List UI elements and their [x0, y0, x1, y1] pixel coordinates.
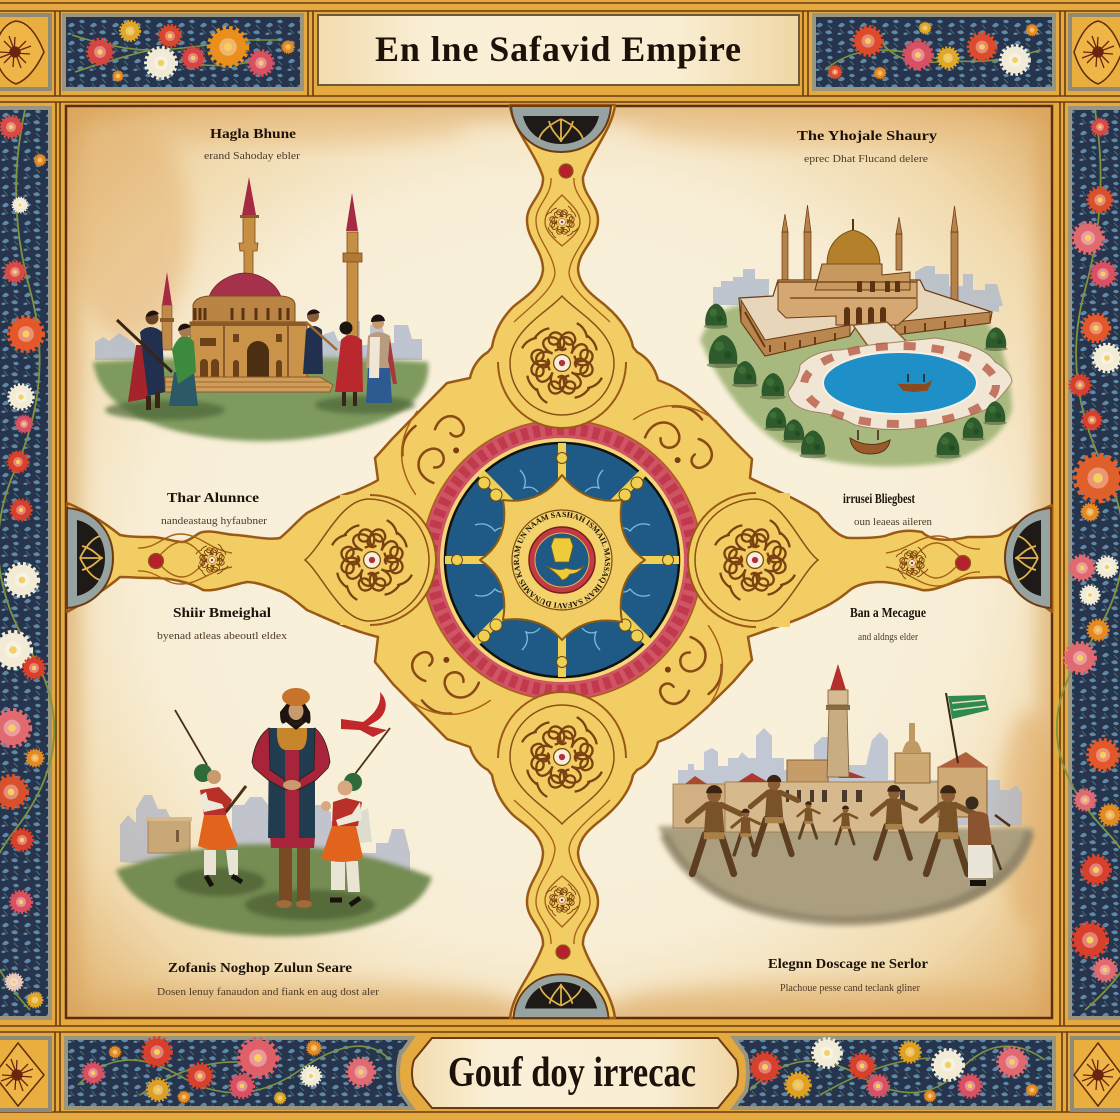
domed hall: [165, 273, 333, 392]
label: top left: [204, 127, 301, 162]
skyline: [120, 795, 410, 883]
ornament silhouette: [67, 105, 1052, 1018]
end caps: [67, 106, 1051, 1018]
watch tower: [826, 664, 850, 777]
label: bottom right: Elegnn Doscage ne Serlor: [768, 957, 928, 972]
bottom banner text: Gouf doy irrecac: [448, 1050, 696, 1096]
ground shadows: [175, 868, 375, 920]
palace: [739, 219, 992, 360]
label: upper left arm: nandeastaug hyfaubner: [161, 516, 268, 527]
ground: [700, 305, 1012, 466]
label: upper right arm: irrusei Bliegbest: [843, 492, 915, 507]
title text: En lne Safavid Empire: [375, 29, 741, 69]
label: bottom right: [768, 957, 928, 994]
central emblem: [546, 538, 584, 580]
central minaret: [239, 177, 259, 277]
label: bottom left: [157, 961, 380, 998]
white-robed figure: [966, 796, 1010, 886]
right minaret: [343, 193, 362, 337]
floral panel: bottom left: [66, 1038, 412, 1108]
ground: [658, 826, 1033, 922]
corner ornament: bottom left: [0, 1038, 50, 1110]
label: upper right arm: oun leaeas aileren: [854, 517, 933, 528]
floral panel: top left: [64, 15, 302, 89]
ground edge shading: [664, 832, 1030, 921]
vignette: mosque with figures, top left: [93, 177, 428, 441]
vignette: battle before the city, bottom right: [658, 664, 1033, 922]
red pennant: [341, 692, 387, 737]
label: bottom left: Zofanis Noghop Zulun Seare: [168, 961, 352, 976]
green flag: [946, 693, 989, 763]
label: lower left arm: byenad atleas abeoutl eldex: [157, 631, 288, 642]
ground: [116, 844, 432, 936]
vignette: noble with attendants, bottom left: [116, 688, 432, 936]
red jewels: [148, 164, 970, 959]
label: top right: The Yhojale Shaury: [797, 129, 937, 144]
right attendant: [321, 728, 390, 905]
label: lower right arm: [850, 606, 926, 643]
label: upper right arm: [843, 492, 933, 528]
small boat: [850, 430, 890, 454]
label: top left: erand Sahoday ebler: [204, 151, 301, 162]
trees: [704, 304, 1008, 458]
pool: [788, 338, 1012, 430]
corner arabesques: [375, 379, 749, 741]
courtier in red: [335, 322, 363, 406]
courtier in blue and cream: [366, 314, 397, 403]
bottom lobe: [498, 692, 626, 824]
ground: [93, 357, 428, 441]
left attendant: [175, 710, 246, 886]
arm inner lines: [138, 178, 980, 944]
minarets: [782, 205, 958, 312]
courtier with red cape: [117, 311, 172, 410]
top lobe: [498, 296, 626, 428]
ring inscription: SHAH ISMAIL MASSAQ IRAN SAFAVI DUNAMIS KARAM UN NAAM SAHA: [514, 512, 610, 608]
floral panel: right border: [1057, 108, 1120, 1018]
bottom banner: [412, 1038, 738, 1108]
courtier in green: [169, 324, 198, 406]
corner ornament: top right: [1070, 15, 1120, 89]
tan building: [146, 817, 192, 853]
fighters: [688, 775, 975, 874]
blue panel motifs: [475, 470, 650, 650]
central noble: [252, 688, 330, 908]
label: bottom left: Dosen lenuy fanaudon and fiank en aug dost aler: [157, 987, 380, 998]
skyline: [95, 321, 422, 360]
label: lower left arm: Shiir Bmeighal: [173, 606, 271, 621]
courtier in navy: [303, 309, 337, 374]
medallion: [426, 422, 698, 698]
label: bottom right: Plachoue pesse cand teclank gliner: [780, 983, 920, 994]
label: top right: eprec Dhat Flucand delere: [804, 154, 928, 165]
palace: [673, 723, 987, 832]
label: upper left arm: [161, 491, 268, 527]
floral panel: top right: [814, 15, 1054, 89]
label: top right: [797, 129, 937, 165]
left minaret: [160, 272, 174, 350]
title banner: [318, 15, 799, 85]
parchment panel: [66, 103, 1060, 1029]
floral panel: left border: [0, 108, 54, 1018]
label: lower right arm: Ban a Mecague: [850, 606, 926, 621]
ground shadows: [105, 396, 415, 420]
corner ornament: top left: [0, 15, 50, 89]
floral panel: bottom right: [734, 1038, 1054, 1108]
left lobe: [305, 495, 436, 625]
spokes: [445, 443, 679, 677]
corner ornament: bottom right: [1072, 1038, 1120, 1110]
label: lower right arm: and aldngs elder: [858, 632, 918, 643]
eight-point star: [480, 475, 645, 640]
label: upper left arm: Thar Alunnce: [167, 491, 259, 506]
vignette: palace with pool, top right: [700, 205, 1012, 466]
label: top left: Hagla Bhune: [210, 127, 296, 142]
right lobe: [688, 493, 818, 627]
small rosettes on arms: [196, 206, 928, 916]
label: lower left arm: [157, 606, 288, 642]
skyline: [678, 728, 1022, 825]
skyline: [713, 266, 1003, 312]
